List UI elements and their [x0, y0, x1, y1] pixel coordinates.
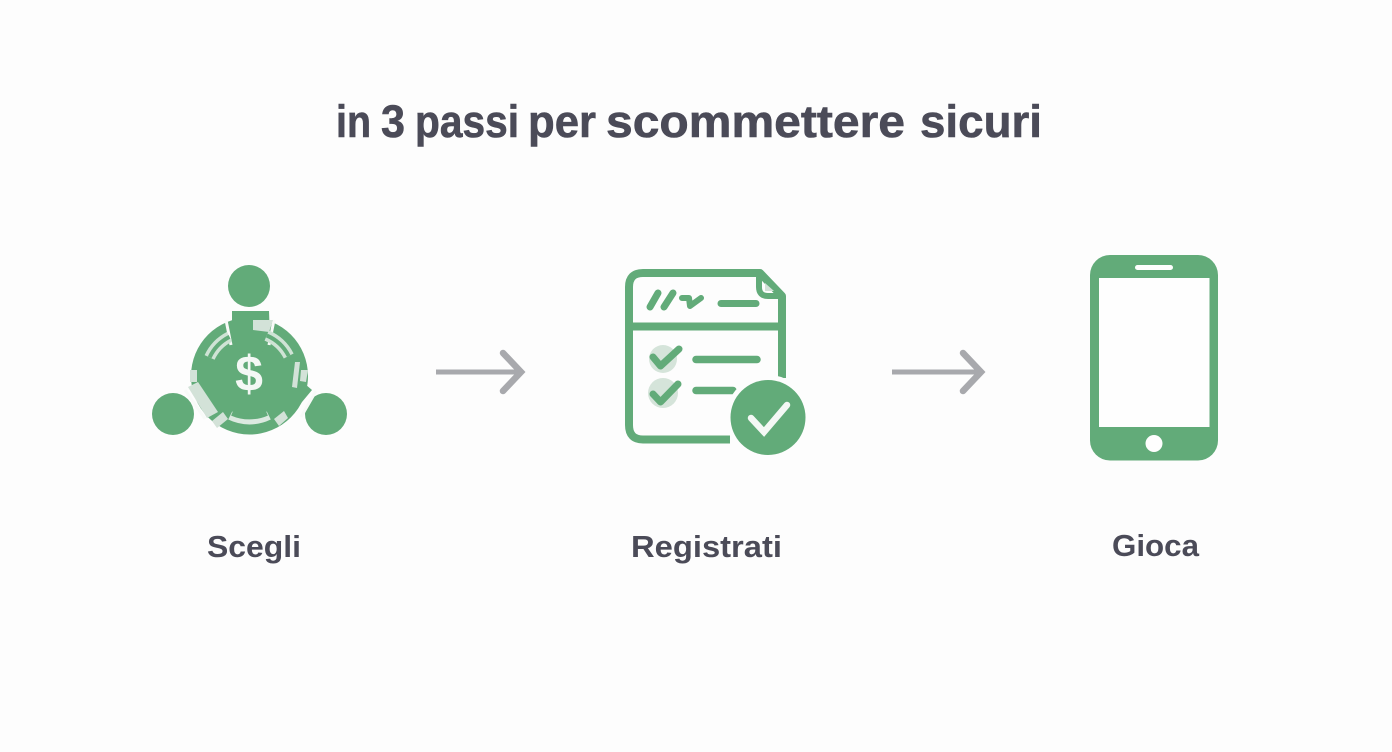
title [336, 96, 1042, 147]
chip left ring arc [210, 337, 230, 357]
chip gaps [185, 320, 316, 419]
title: scommettere [606, 96, 905, 147]
label: Registrati: Registrati [631, 529, 782, 564]
title: 3 [381, 96, 405, 147]
chip right ring arc [267, 336, 289, 356]
top circle [228, 265, 270, 307]
checklist item 2 [648, 378, 733, 408]
arrow 2 [892, 353, 981, 391]
step 3: Gioca icon (smartphone) [1090, 255, 1218, 460]
chip top tab [232, 311, 270, 352]
step 1: Scegli icon (poker chip) [152, 265, 347, 435]
check badge [726, 375, 810, 459]
label: Gioca: Gioca [1112, 528, 1200, 563]
chip bottom ring arc [230, 414, 269, 420]
phone speaker [1135, 265, 1173, 270]
document outline [629, 273, 782, 440]
folded corner [759, 276, 782, 296]
phone screen [1099, 278, 1210, 427]
chip light patches [188, 320, 308, 428]
step 2: Registrati icon (form with check) [629, 273, 810, 459]
title: passi [415, 96, 519, 147]
chip lower right tab [276, 378, 312, 420]
label: Scegli: Scegli [207, 529, 301, 564]
checklist item 1 [649, 345, 757, 373]
phone home button [1146, 435, 1162, 452]
header marks [650, 293, 756, 307]
left circle [152, 393, 194, 435]
dollar sign: $ [235, 346, 263, 402]
chip body [191, 318, 308, 434]
right circle [305, 393, 347, 435]
header divider [629, 322, 782, 330]
title: in [336, 96, 371, 147]
title: per [528, 96, 596, 147]
phone body [1090, 255, 1218, 460]
title: sicuri [920, 96, 1042, 147]
arrow 1 [436, 353, 521, 391]
